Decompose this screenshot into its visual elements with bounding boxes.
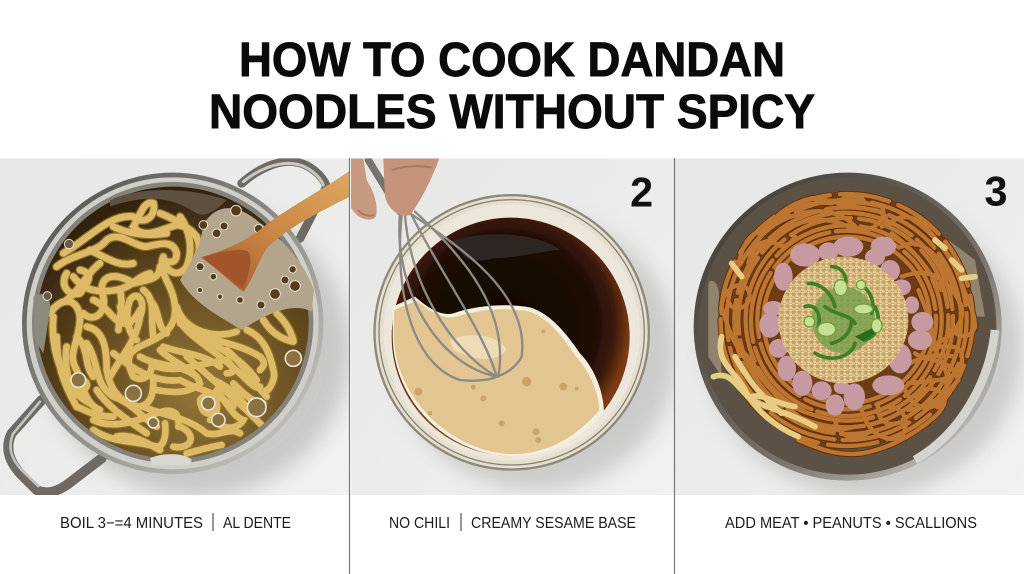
noodles in water [50, 203, 293, 453]
minced meat ring [759, 237, 933, 416]
caption: step 1: BOIL 3−=4 MINUTES [60, 515, 203, 532]
icon: pot handles [8, 161, 327, 492]
icon: hand holding whisk [350, 158, 439, 220]
caption: step 3: ADD MEAT • PEANUTS • SCALLIONS [725, 515, 977, 532]
yellow plain noodles [713, 240, 975, 437]
icon: wire whisk [368, 160, 522, 381]
title: NOODLES WITHOUT SPICY [209, 86, 815, 139]
icon: steel mixing bowl [694, 173, 1002, 481]
caption: step 2: CREAMY SESAME BASE [471, 515, 636, 532]
icon: ceramic bowl [373, 194, 650, 471]
title: HOW TO COOK DANDAN [239, 34, 785, 87]
caption: step 2 [389, 513, 636, 532]
panel: step 2 sesame sauce photo [350, 158, 677, 495]
creamy sesame base [393, 297, 604, 456]
step number 2: 2 [630, 169, 653, 215]
soy sauce liquid [392, 218, 630, 456]
caption: step 1 [60, 513, 291, 532]
title [209, 34, 815, 139]
caption: step 1: AL DENTE [223, 515, 291, 532]
panel: step 1 boil noodles photo [0, 158, 353, 497]
column dividers [350, 158, 674, 574]
crushed peanuts [778, 257, 908, 383]
icon: wooden spoon [201, 168, 353, 292]
icon: steel pot [22, 173, 323, 474]
green scallions [804, 267, 882, 358]
sauced noodles [718, 192, 975, 454]
boiling foam [33, 190, 314, 465]
panel: step 3 finished bowl photo [675, 158, 1024, 497]
caption: step 2: NO CHILI [389, 515, 450, 532]
step number 3: 3 [984, 169, 1007, 215]
